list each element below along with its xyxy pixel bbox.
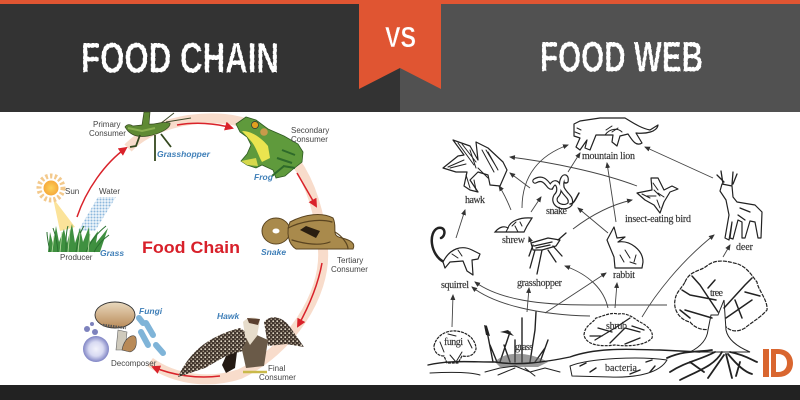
food web labels: deer [736, 242, 754, 253]
icon: shrew [495, 218, 532, 232]
species labels: Consumer [259, 373, 296, 382]
species labels: Secondary [291, 126, 329, 135]
food web labels: grasshopper [517, 278, 563, 289]
icon: frog [236, 117, 303, 178]
food web labels: fungi [444, 337, 463, 348]
vs text: VS [385, 22, 416, 54]
species labels: Producer [60, 253, 93, 262]
food web labels: mountain lion [582, 151, 635, 162]
species labels: Consumer [89, 129, 126, 138]
food web arrows [452, 145, 730, 327]
cycle arrows [77, 123, 322, 377]
food web labels: shrew [502, 235, 526, 246]
icon: grasshopper [125, 112, 191, 161]
food web labels: shrub [606, 321, 627, 332]
species labels: Consumer [291, 135, 328, 144]
header: food chain side [0, 0, 400, 112]
icon: hawk line art [443, 140, 507, 192]
icon: hawk [178, 317, 304, 377]
icon: insect-eating bird [637, 178, 678, 213]
ground and soil [428, 349, 700, 377]
icon: fungi line art [434, 331, 476, 363]
species labels: Tertiary [337, 256, 363, 265]
icon: sun [39, 176, 75, 231]
species labels: Water [99, 187, 120, 196]
food web labels: squirrel [441, 280, 469, 291]
species labels: Frog [254, 172, 274, 182]
species labels: Snake [261, 247, 286, 257]
food web labels: hawk [465, 195, 485, 206]
logo [763, 349, 793, 377]
species labels [60, 120, 368, 382]
icon: snake [262, 215, 354, 249]
food chain label: Food Chain [142, 238, 240, 257]
food web labels [441, 151, 754, 374]
top accent stripe [0, 0, 800, 4]
header: food web side [400, 0, 800, 112]
icon: shrub [584, 313, 652, 346]
food web labels: snake [546, 206, 568, 217]
icon: grasshopper line art [529, 233, 566, 274]
species labels: Sun [65, 187, 79, 196]
species labels: Grasshopper [157, 149, 211, 159]
food web labels: tree [710, 288, 724, 299]
icon: tree [667, 261, 767, 380]
icon: fungi and bacteria [83, 302, 163, 362]
species labels: Consumer [331, 265, 368, 274]
food web labels: grass [515, 342, 533, 353]
icon: snake line art [535, 177, 579, 207]
icon: squirrel [432, 228, 480, 275]
species labels: Final [268, 364, 286, 373]
icon: grass line art [484, 312, 560, 376]
icon: grass [47, 224, 109, 252]
species labels: Hawk [217, 311, 240, 321]
food web labels: rabbit [613, 270, 635, 281]
title: food chain: FOOD CHAIN [81, 34, 279, 82]
icon: mountain lion [574, 118, 658, 150]
title: food web: FOOD WEB [540, 34, 703, 82]
species labels: Decomposer [111, 359, 157, 368]
species labels: Fungi [139, 306, 163, 316]
icon: deer [717, 171, 762, 240]
species labels: Grass [100, 248, 124, 258]
cycle ring [128, 118, 323, 379]
panel: food chain diagram [39, 112, 368, 382]
icon: water [78, 197, 116, 231]
food web labels: insect-eating bird [625, 214, 691, 225]
icon: rabbit [607, 227, 643, 268]
footer bar [0, 385, 800, 400]
food web labels: bacteria [605, 363, 638, 374]
panel: food web diagram [428, 118, 767, 380]
vs ribbon [359, 0, 441, 89]
species labels: Primary [93, 120, 121, 129]
